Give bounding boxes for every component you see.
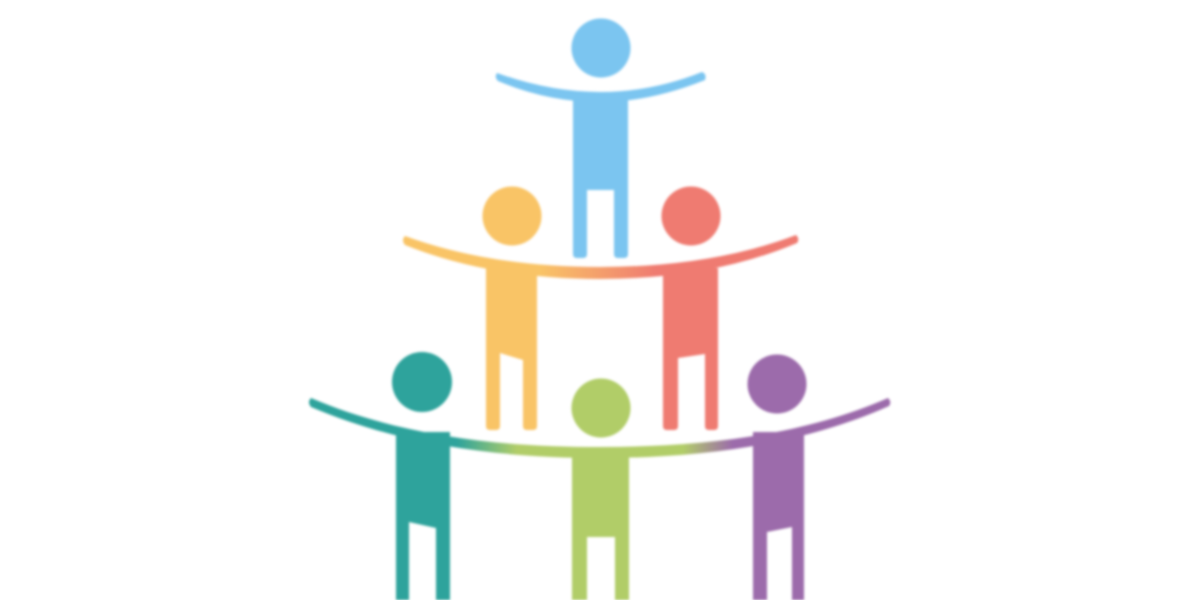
bottom right figure: purple [748,354,806,600]
bottom row arms [309,398,890,458]
middle right figure: coral [662,186,720,430]
top figure: blue [496,18,706,258]
bottom centre figure: green [572,378,630,600]
middle left figure: yellow [482,186,542,430]
middle row arms [403,235,798,279]
bottom left figure: teal [392,352,452,600]
